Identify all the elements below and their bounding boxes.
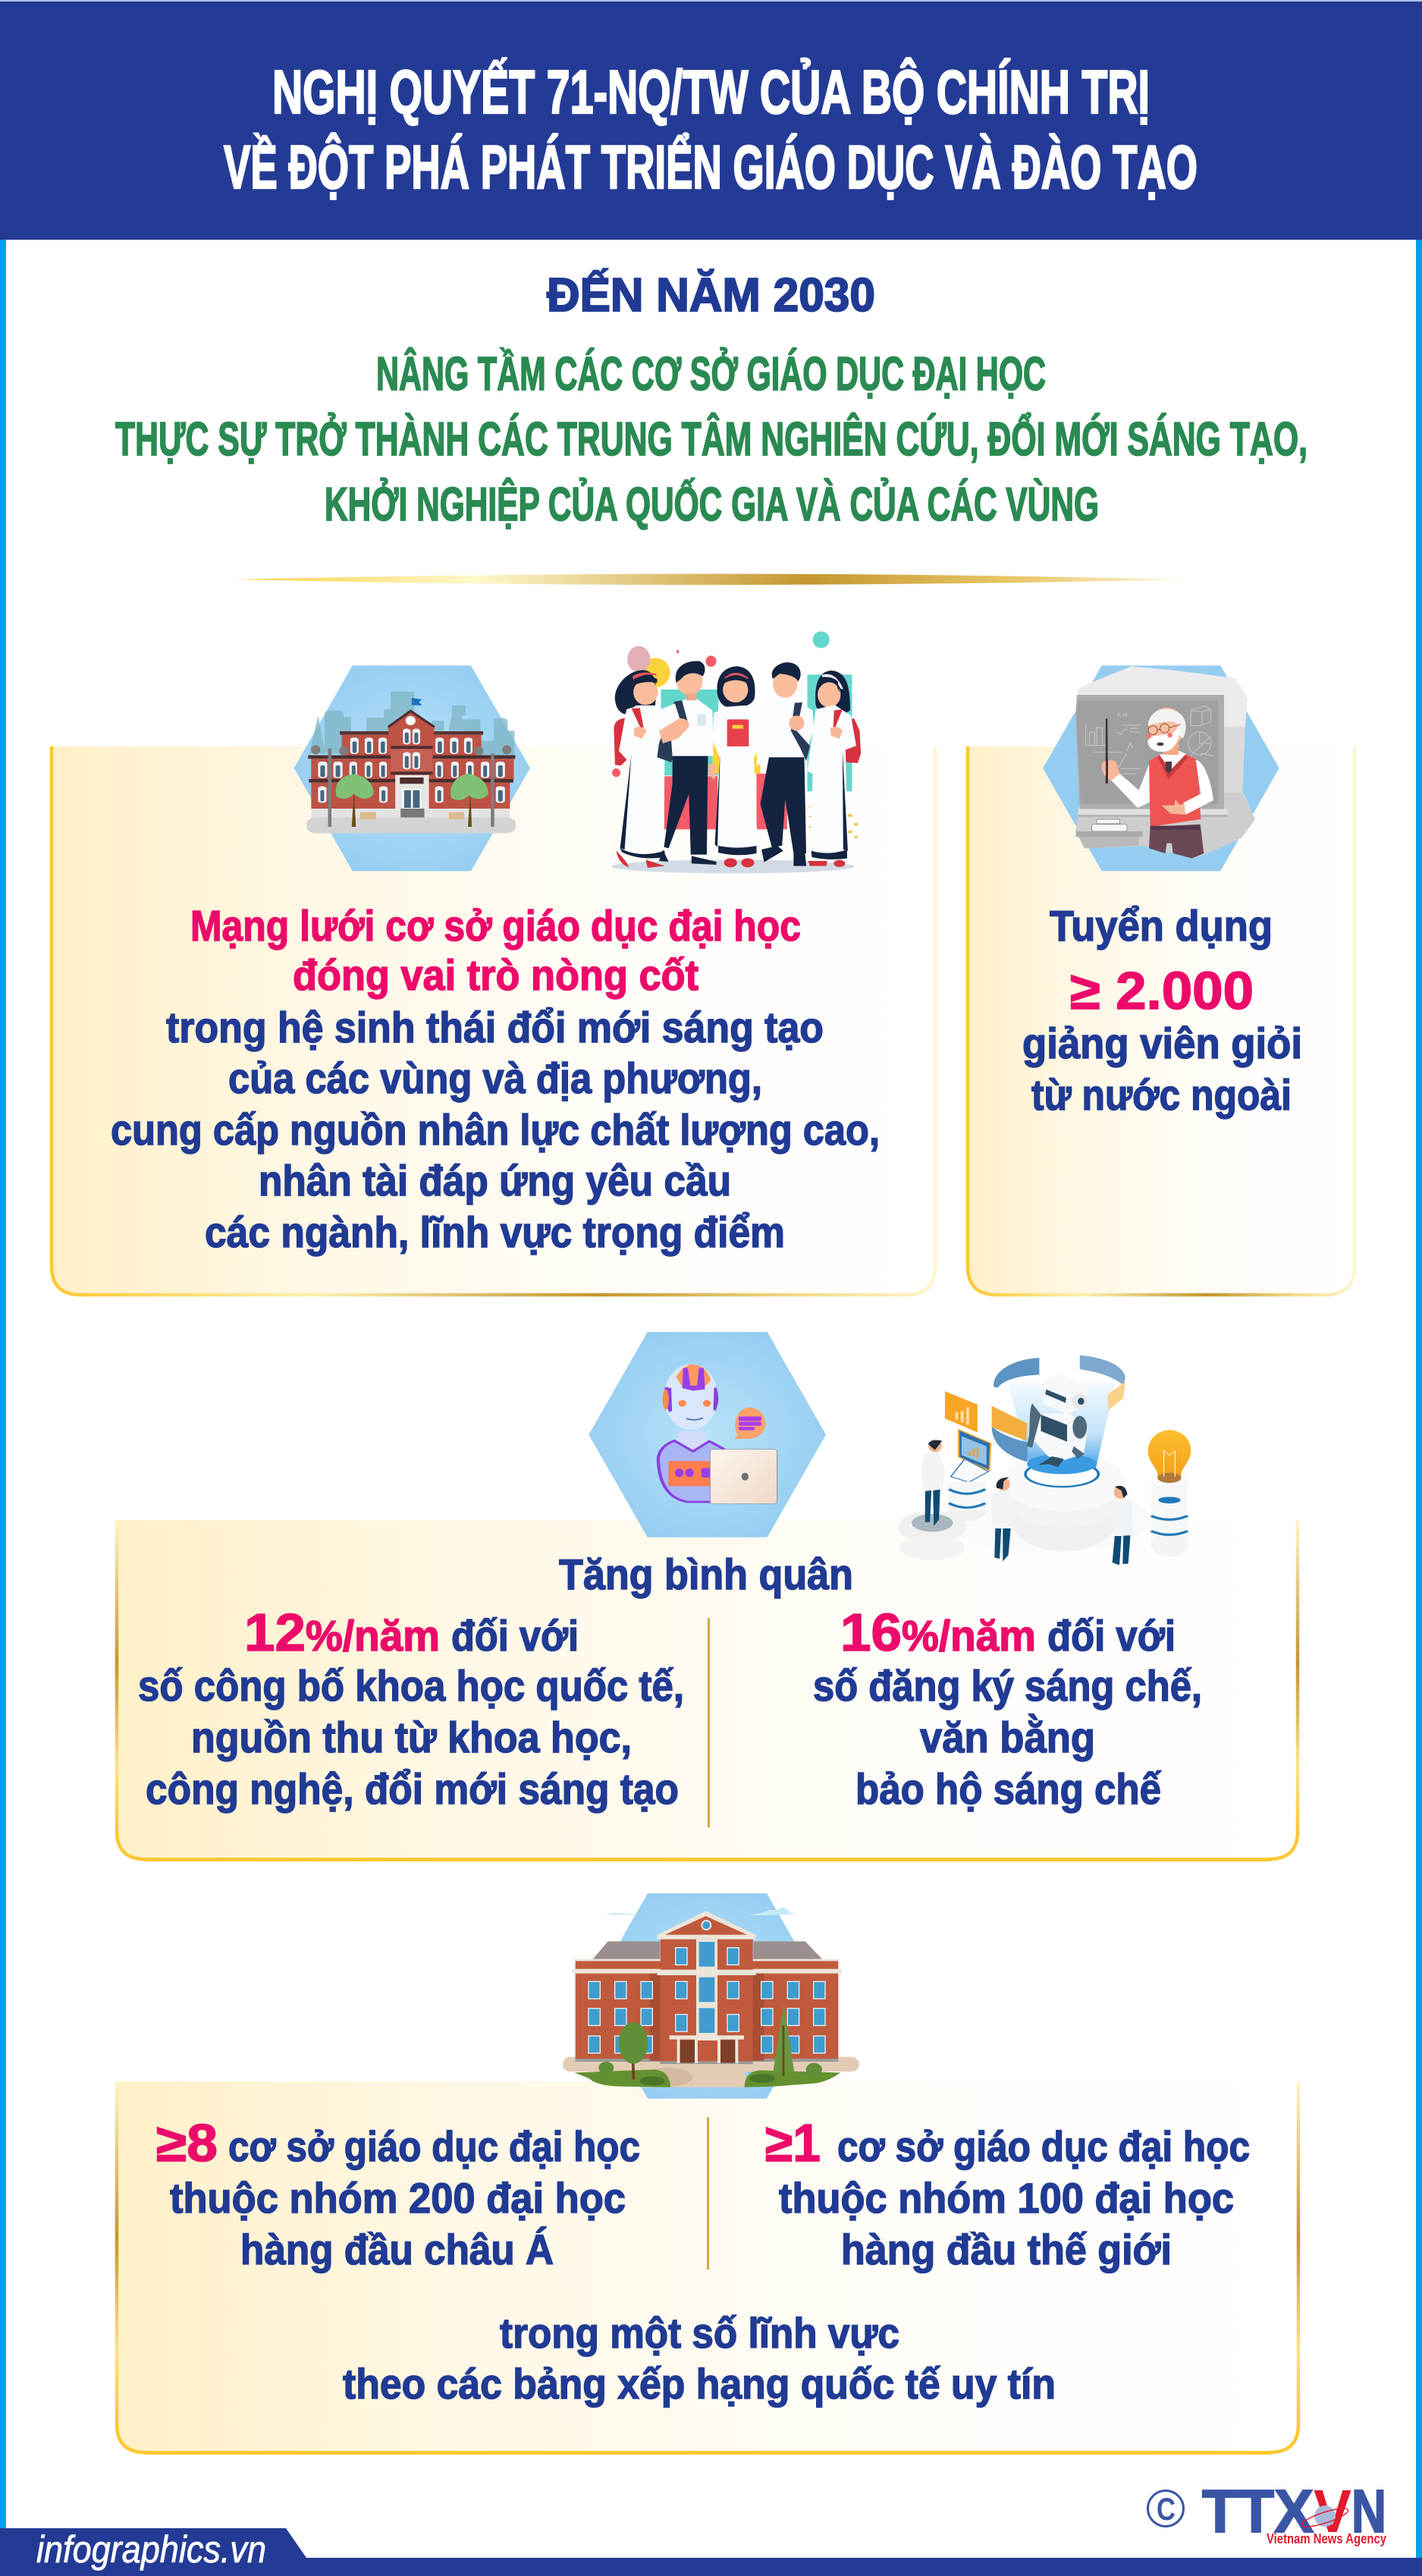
icon: students group [611,631,861,873]
panel 3 text [138,1550,1202,1814]
man 2 [994,1528,1001,1559]
left column: 12%: 12 [244,1603,306,1662]
logo: TTXVN: Vietnam News Agency [1267,2531,1386,2546]
left column: 12%: công nghệ, đổi mới sáng tạo [146,1765,679,1814]
icon: teacher hexagon [1043,665,1279,871]
icon: university building hexagon [563,1893,859,2099]
panel 1 text: Mạng lưới cơ sở giáo dục đại học [190,902,801,950]
girl 2 [717,666,755,707]
icon: AI robot hexagon [589,1332,826,1538]
girl 3 [839,718,861,763]
closing note: trong một số lĩnh vực [500,2309,899,2357]
panel 2 text [1022,902,1302,1120]
right column: at least 1: ≥1 [765,2113,821,2172]
left column: 12% [138,1603,684,1814]
logo: TTXVN [1202,2477,1386,2546]
man 3 [1113,1536,1122,1565]
panel: annual growth [115,1520,1299,1861]
right column: 16%: %/năm [902,1612,1036,1660]
icon: teacher hexagon: E M [1117,712,1127,718]
boy 1 [664,756,708,855]
green goal statement: NÂNG TẦM CÁC CƠ SỞ GIÁO DỤC ĐẠI HỌC [376,348,1046,401]
site name: infographics.vn [36,2528,266,2571]
panel 1 text: trong hệ sinh thái đổi mới sáng tạo [166,1004,824,1052]
left column: 12%: đối với [451,1612,579,1660]
light bulb [1151,1479,1188,1545]
panel 1 text [111,902,880,1257]
left column: at least 8: cơ sở giáo dục đại học [228,2122,640,2170]
right column: 16%: bảo hộ sáng chế [855,1765,1161,1814]
closing note: theo các bảng xếp hạng quốc tế uy tín [343,2360,1056,2408]
right column: 16%: 16 [840,1603,902,1662]
icon: robot lab illustration [899,1356,1191,1565]
footer band [0,2528,1422,2576]
boy 2 [761,756,806,853]
green goal statement [115,348,1307,531]
copyright symbol [1148,2491,1183,2527]
right column: at least 1: cơ sở giáo dục đại học [837,2122,1250,2170]
left column: 12%: %/năm [306,1612,440,1660]
panel 1 text: nhân tài đáp ứng yêu cầu [259,1157,731,1205]
closing note [343,2309,1056,2408]
icon: campus hexagon [294,665,530,871]
copyright symbol: C [1157,2491,1176,2527]
heading: by 2030: ĐẾN NĂM 2030 [547,269,875,322]
panel 1 text: của các vùng và địa phương, [228,1054,762,1103]
logo: TTXVN: V [1314,2477,1351,2545]
panel 2 text: Tuyển dụng [1050,902,1273,950]
left column: at least 8: hàng đầu châu Á [240,2226,554,2273]
panel: rankings [115,2081,1300,2455]
left column: at least 8: thuộc nhóm 200 đại học [170,2174,626,2222]
left column: at least 8: ≥8 [156,2113,218,2172]
panel 4 text [156,2113,1250,2408]
logo: TTXVN: TTX [1202,2477,1314,2545]
right column: at least 1: thuộc nhóm 100 đại học [779,2174,1234,2222]
panel 2 text: ≥ 2.000 [1070,961,1254,1020]
panel 2 text: giảng viên giỏi [1022,1019,1302,1068]
right column: 16%: đối với [1047,1612,1176,1660]
right column: 16%: văn bằng [920,1713,1095,1762]
right column: 16%: số đăng ký sáng chế, [813,1662,1202,1711]
left column: 12%: số công bố khoa học quốc tế, [138,1662,684,1711]
panel 1 text: đóng vai trò nòng cốt [293,951,698,1000]
panel 1 text: các ngành, lĩnh vực trọng điểm [205,1208,785,1257]
right column: at least 1 [765,2113,1250,2273]
left column: at least 8 [156,2113,640,2273]
header banner [0,0,1422,240]
man 1 [899,1511,966,1544]
panel: university network [50,746,937,1296]
panel: lecturers [966,746,1356,1296]
panel 3 text: Tăng bình quân [559,1550,853,1599]
green goal statement: KHỞI NGHIỆP CỦA QUỐC GIA VÀ CỦA CÁC VÙNG [325,479,1099,531]
girl 1 [615,670,656,715]
right column: 16% [813,1603,1202,1814]
panel 2 text: từ nước ngoài [1031,1071,1292,1120]
logo: TTXVN: N [1351,2477,1386,2545]
panel 1 text: cung cấp nguồn nhân lực chất lượng cao, [111,1106,880,1154]
gold divider [236,573,1188,585]
left column: 12%: nguồn thu từ khoa học, [191,1714,632,1762]
right column: at least 1: hàng đầu thế giới [841,2226,1172,2273]
